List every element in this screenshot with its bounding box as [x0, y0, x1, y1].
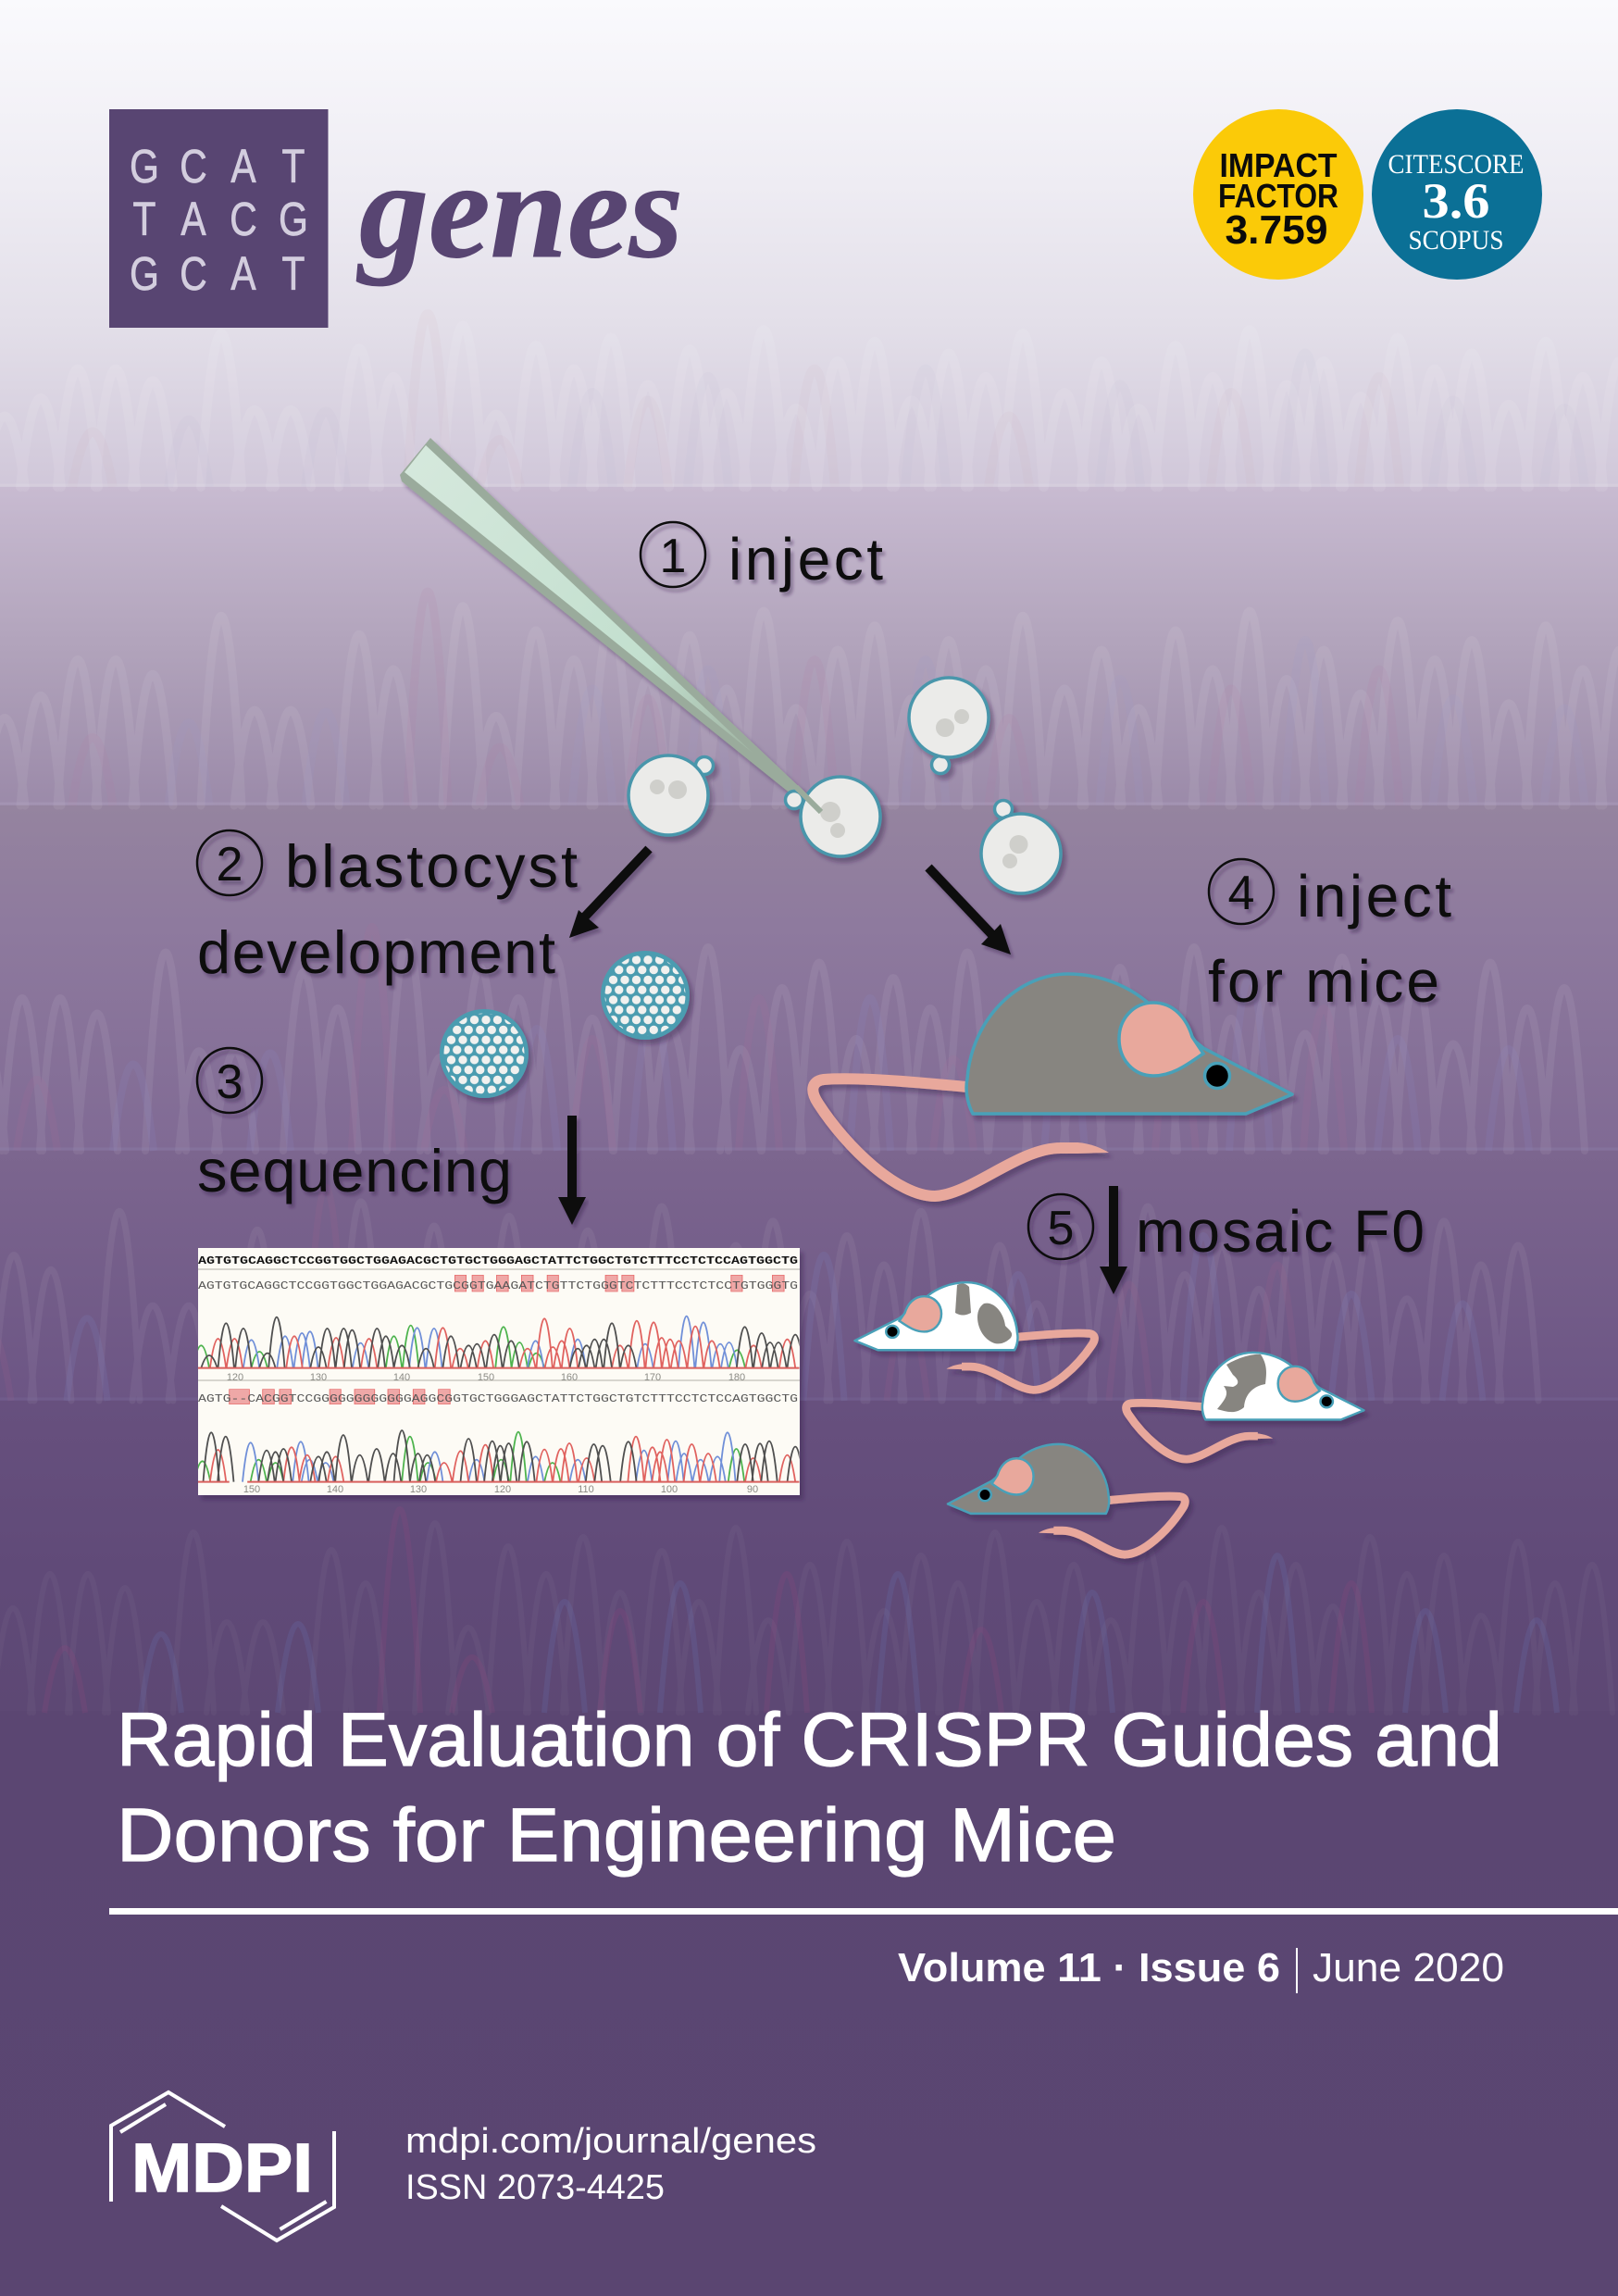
badge: impact factor: IMPACT	[1220, 146, 1337, 184]
egg: lower right	[981, 800, 1061, 893]
logo: GCAT block: G	[130, 247, 159, 300]
step 4 label: inject	[1297, 863, 1451, 930]
step 5 label: mosaic F0	[1136, 1198, 1425, 1265]
chromatogram trace 2	[194, 1430, 803, 1482]
position labels: 130	[310, 1372, 327, 1383]
badge: impact factor: FACTOR	[1218, 177, 1338, 215]
position labels: 150	[243, 1484, 260, 1495]
position labels: 140	[327, 1484, 343, 1495]
article title: Rapid Evaluation of CRISPR Guides and	[117, 1698, 1502, 1782]
logo: GCAT block: A	[230, 247, 256, 300]
article title: Donors for Engineering Mice	[117, 1793, 1116, 1878]
step 1 label	[641, 522, 883, 593]
mismatch highlights	[230, 1275, 784, 1404]
logo: GCAT block: T	[133, 193, 156, 245]
badge: citescore: 3.6	[1422, 173, 1490, 229]
logo: GCAT block: G	[130, 140, 159, 193]
position labels: 170	[644, 1372, 661, 1383]
journal URL and ISSN: ISSN 2073-4425	[405, 2168, 665, 2207]
gray mouse: bottom	[948, 1444, 1185, 1554]
egg: upper right	[909, 678, 989, 774]
logo: GCAT block: T	[282, 247, 305, 300]
logo: GCAT block: C	[230, 193, 257, 245]
position labels	[227, 1372, 758, 1495]
step 1 label: 1	[660, 530, 686, 583]
step 4 label: for mice	[1208, 948, 1439, 1015]
issue line: Volume 11 · Issue 6	[898, 1945, 1280, 1990]
journal URL and ISSN	[405, 2122, 816, 2207]
sample 1 sequence: AGTGTGCAGGCTCCGGTGGCTGGAGACGCTGCGGTGAAGATCTGTTCTGGGTCTCTTTCCTCTCCTGTGGGTG	[198, 1279, 798, 1292]
issue line: June 2020	[1313, 1945, 1504, 1990]
badge: citescore: SCOPUS	[1409, 225, 1503, 256]
badge: citescore	[1372, 109, 1542, 280]
background chromatogram traces	[0, 314, 1618, 1713]
position labels: 120	[494, 1484, 511, 1495]
blastocyst: upper	[601, 951, 690, 1040]
logo: MDPI	[111, 2092, 334, 2240]
sample 2 sequence: AGTG--CACGGTCCGGGGGGGGGGGGAGGCGGTGCTGGGAGCTATTCTGGCTGTCTTTCCTCTCCAGTGGCTG	[198, 1392, 798, 1405]
article title	[117, 1698, 1502, 1878]
blastocyst: lower	[440, 1009, 529, 1098]
step 2 label: development	[197, 918, 555, 986]
step 3 label	[197, 1048, 512, 1204]
arrow: to mouse	[928, 867, 1011, 955]
arrow: to offspring	[1100, 1186, 1127, 1294]
position labels: 120	[227, 1372, 243, 1383]
logo: GCAT block	[109, 109, 328, 328]
position labels: 160	[561, 1372, 578, 1383]
logo: GCAT block: T	[282, 140, 305, 193]
step 4 label	[1208, 859, 1451, 1015]
logo: GCAT block: C	[180, 247, 207, 300]
step 5 label	[1028, 1194, 1425, 1265]
badge: impact factor: 3.759	[1226, 207, 1327, 253]
large gray mouse	[813, 974, 1292, 1196]
top reference sequence: AGTGTGCAGGCTCCGGTGGCTGGAGACGCTGTGCTGGGAGCTATTCTGGCTGTCTTTCCTCTCCAGTGGCTG	[198, 1254, 798, 1267]
position labels: 150	[478, 1372, 494, 1383]
step 2 label: 2	[217, 838, 243, 892]
issue line	[898, 1945, 1504, 1993]
journal name: genes	[356, 133, 683, 287]
badge: citescore: CITESCORE	[1388, 149, 1524, 180]
arrow: to sequencing	[558, 1116, 586, 1225]
mosaic mouse: left	[855, 1282, 1094, 1390]
position labels: 140	[393, 1372, 410, 1383]
logo: GCAT block: A	[180, 193, 206, 245]
egg: injected	[785, 777, 880, 856]
step 3 label: sequencing	[197, 1137, 512, 1204]
sequencing chromatogram panel	[193, 1248, 803, 1495]
position labels: 90	[747, 1484, 758, 1495]
step 2 label: blastocyst	[285, 832, 578, 900]
step 4 label: 4	[1228, 867, 1254, 920]
arrow: to blastocysts	[569, 849, 649, 938]
position labels: 180	[728, 1372, 745, 1383]
step 3 label: 3	[217, 1055, 243, 1109]
icon: injection pipette	[400, 438, 824, 813]
step 5 label: 5	[1048, 1202, 1074, 1255]
logo: MDPI: MDPI	[131, 2129, 313, 2206]
logo: GCAT block: G	[279, 193, 308, 245]
step 1 label: inject	[728, 526, 883, 593]
step 2 label	[197, 830, 578, 986]
position labels: 130	[410, 1484, 427, 1495]
journal URL and ISSN: mdpi.com/journal/genes	[405, 2122, 816, 2161]
position labels: 110	[578, 1484, 594, 1495]
logo: GCAT block: A	[230, 140, 256, 193]
mosaic mouse: right	[1126, 1353, 1363, 1459]
chromatogram trace 1	[193, 1316, 803, 1368]
egg: left	[629, 755, 713, 835]
logo: GCAT block: C	[180, 140, 207, 193]
position labels: 100	[661, 1484, 678, 1495]
badge: impact factor	[1193, 109, 1363, 280]
divider rule	[109, 1908, 1618, 1915]
